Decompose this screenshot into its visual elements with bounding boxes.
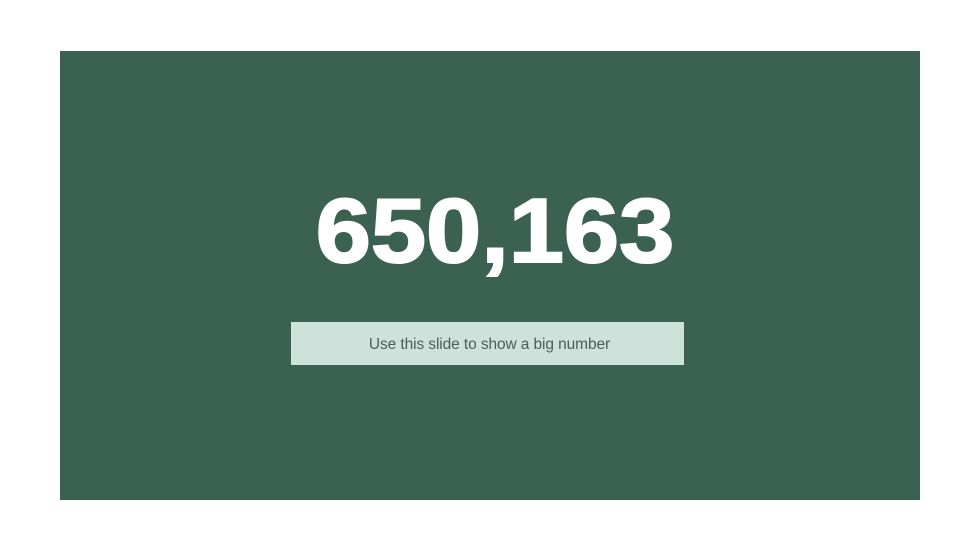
panel: green background (60, 51, 920, 500)
caption box (291, 322, 684, 365)
big number: 650,163 (316, 180, 674, 282)
caption box: Use this slide to show a big number (369, 336, 610, 353)
